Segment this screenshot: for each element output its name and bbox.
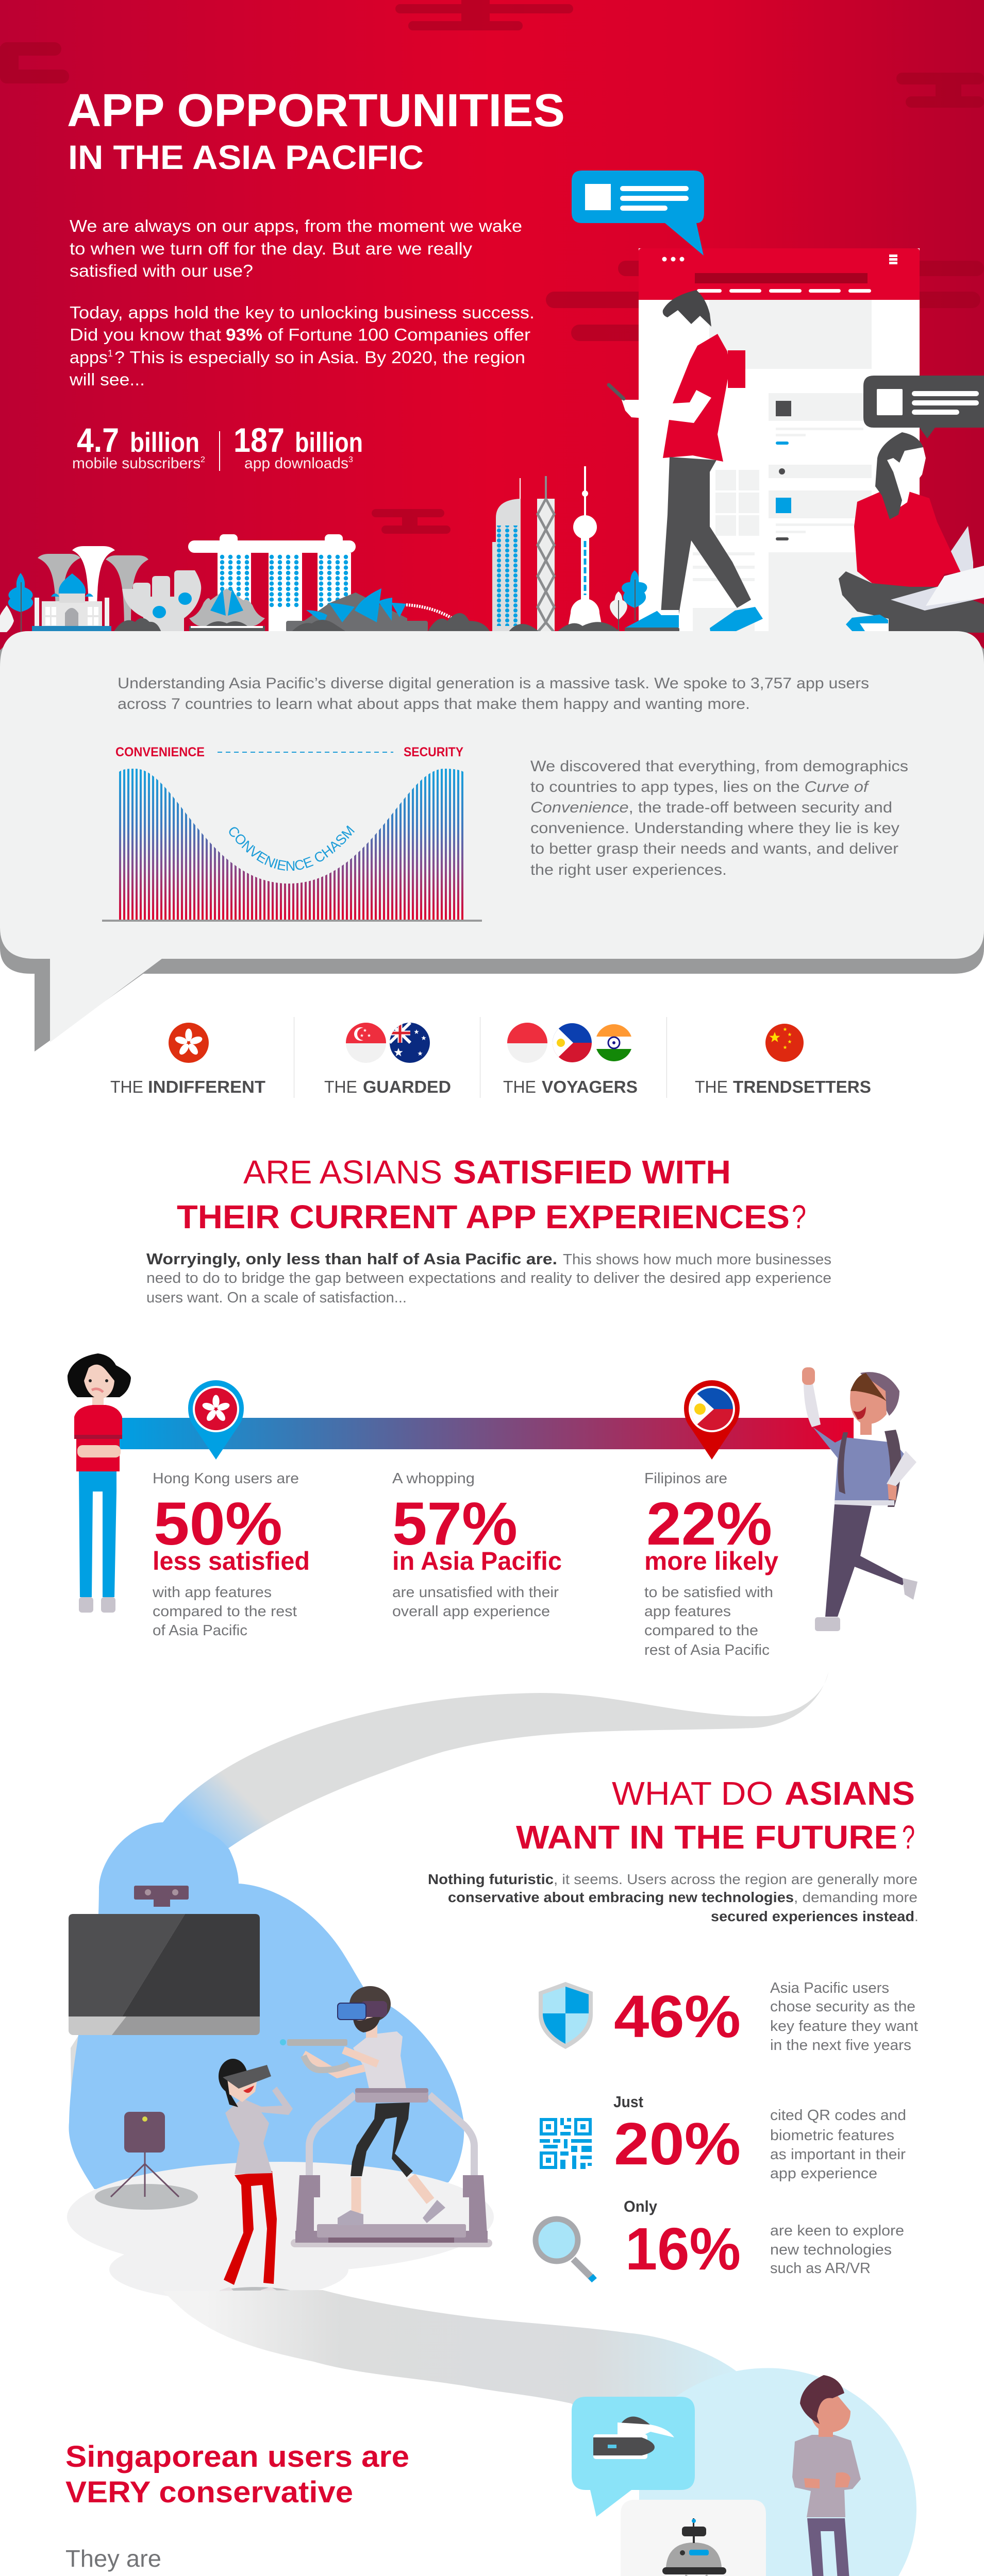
heading: future: ASIANS <box>785 1775 915 1812</box>
intro text: will see... <box>69 370 145 389</box>
text: curve of convenience: convenience. Understanding where they lie is key <box>530 820 899 837</box>
heading: future <box>516 1775 915 1856</box>
text: intro <box>118 675 869 713</box>
intro text: Today, apps hold the key to unlocking business success. <box>70 303 535 322</box>
intro text: We are always on our apps, from the moment we wake <box>70 216 522 235</box>
text: future intro <box>428 1871 919 1924</box>
panel: hero <box>0 0 984 670</box>
heading: future: WHAT DO <box>612 1775 773 1812</box>
stat: asia pacific: in Asia Pacific <box>392 1547 562 1575</box>
stat: 20 percent: Just <box>613 2093 643 2111</box>
stat: hong kong: less satisfied <box>153 1547 310 1575</box>
intro text: satisfied with our use? <box>70 261 253 280</box>
stat: hong kong: with app features <box>152 1584 272 1601</box>
stat: philippines: 22% <box>646 1490 772 1558</box>
figure: thoughtful man <box>779 2375 880 2576</box>
icon: magnifying glass <box>536 2219 594 2280</box>
stat: singapore 16 percent: They are <box>65 2545 161 2572</box>
label: the voyagers: THE <box>503 1077 536 1096</box>
icon: vr headset bubble <box>572 2397 695 2517</box>
figure: man with phone <box>609 290 763 632</box>
stat: hong kong: Hong Kong users are <box>153 1470 299 1487</box>
icon: dark chat bubble <box>863 376 984 438</box>
scene: singapore user <box>572 2368 919 2576</box>
heading: satisfaction: ? <box>792 1198 806 1235</box>
stat: 16 percent: such as AR/VR <box>770 2260 871 2277</box>
landmark: artscience museum <box>122 570 201 632</box>
stat: 20 percent: 20% <box>614 2110 741 2177</box>
stat: 16 percent <box>536 2197 904 2282</box>
text: curve of convenience: to countries to app types, lies on the Curve of <box>530 778 870 795</box>
text: satisfaction intro <box>146 1250 831 1306</box>
background clouds <box>0 0 984 534</box>
heading: singapore: Singaporean users are <box>65 2440 409 2473</box>
stat: 46 percent: 46% <box>614 1983 741 2050</box>
text: intro: across 7 countries to learn what about apps that make them happy and wanting more. <box>118 696 750 713</box>
satisfaction scale bar <box>119 1418 854 1449</box>
text: curve of convenience: We discovered that everything, from demographics <box>530 758 908 775</box>
landmark: hong kong tower <box>492 478 521 632</box>
stat: mobile subscribers: 4.7 <box>77 421 119 459</box>
flag: hong kong <box>169 1023 209 1063</box>
stat: asia pacific: 57% <box>392 1490 518 1558</box>
text: curve of convenience <box>530 758 908 878</box>
scene: vr room <box>67 1822 494 2312</box>
text: curve of convenience: to better grasp their needs and wants, and deliver <box>530 840 898 857</box>
ribbon: top <box>163 1672 828 1855</box>
intro text <box>69 216 535 389</box>
flags: indonesia, philippines, india <box>507 1023 632 1064</box>
title: IN THE ASIA PACIFIC <box>68 138 424 176</box>
landmark: gardens by the bay <box>38 546 148 625</box>
stat: 46 percent: key feature they want <box>770 2018 918 2035</box>
panel: speech bubble intro <box>0 631 984 1052</box>
label: the indifferent: INDIFFERENT <box>148 1077 265 1096</box>
intro text: 93% <box>226 325 262 344</box>
landmark: sydney opera house <box>286 588 461 632</box>
icon: shield <box>539 1982 593 2049</box>
stat: 20 percent: cited QR codes and <box>770 2107 906 2124</box>
stat: 20 percent <box>540 2093 906 2182</box>
chart: convenience curve: CONVENIENCE <box>115 745 205 759</box>
landmark: lotus temple <box>189 588 265 632</box>
stat: philippines: Filipinos are <box>644 1470 727 1487</box>
label: the trendsetters: THE <box>695 1077 728 1096</box>
icon: robot bubble <box>621 2500 766 2576</box>
figure: woman with headset <box>205 2059 306 2312</box>
title: APP OPPORTUNITIES <box>67 85 565 137</box>
icon: speaker on tripod <box>95 2112 198 2210</box>
stat: app downloads <box>234 421 363 472</box>
chart: convenience curve <box>102 745 482 922</box>
text: future intro: Nothing futuristic <box>428 1871 554 1887</box>
landmark: marina bay sands <box>188 534 356 632</box>
text: future intro: . <box>914 1908 919 1924</box>
label: the guarded <box>324 1077 451 1096</box>
stat: philippines: app features <box>644 1603 731 1620</box>
stat: philippines: more likely <box>644 1547 778 1575</box>
figure: woman with laptop <box>839 432 984 633</box>
skyline <box>0 466 647 633</box>
heading: satisfaction: SATISFIED WITH <box>453 1154 731 1191</box>
heading: future: WANT IN THE FUTURE <box>516 1819 897 1856</box>
stat: 46 percent <box>539 1980 918 2054</box>
text: satisfaction intro: need to do to bridge the gap between expectations and reality to deliver the desired app experience <box>146 1270 831 1286</box>
figure: unhappy woman <box>68 1353 131 1613</box>
stat: philippines <box>644 1470 778 1658</box>
text: future intro: conservative about embracing new technologies <box>448 1889 794 1905</box>
text: curve of convenience: the right user experiences. <box>530 861 727 878</box>
landmark: lattice tower <box>537 476 555 633</box>
phone screen <box>639 248 920 635</box>
icon: shrubs <box>113 613 620 632</box>
ribbon: middle <box>163 2290 773 2473</box>
stat: 20 percent: as important in their <box>770 2146 906 2163</box>
segment row <box>110 1017 871 1098</box>
stat: hong kong: of Asia Pacific <box>153 1622 247 1639</box>
text: future intro: , it seems. Users across the region are generally more <box>554 1871 918 1887</box>
stat: asia pacific <box>392 1470 562 1620</box>
heading: satisfaction <box>177 1154 806 1235</box>
stat: mobile subscribers: billion <box>130 427 199 458</box>
landmark: oriental pearl tower <box>567 466 603 632</box>
stat: 20 percent: app experience <box>770 2165 877 2182</box>
landmark: taj mahal <box>32 573 111 632</box>
intro text: Did you know that <box>70 325 221 344</box>
stat: 46 percent: Asia Pacific users <box>770 1980 889 1996</box>
stat: hong kong <box>152 1470 310 1639</box>
stat: mobile subscribers: 2 <box>201 455 205 464</box>
stat: asia pacific: are unsatisfied with their <box>392 1584 559 1601</box>
icon: philippines pin <box>684 1380 740 1460</box>
stat: 20 percent: biometric features <box>770 2127 894 2144</box>
figure: man on vr treadmill <box>280 1986 492 2247</box>
chart: convenience curve: CONVENIENCE CHASM <box>229 825 355 871</box>
stat: mobile subscribers: mobile subscribers <box>72 455 201 472</box>
intro text: to when we turn off for the day. But are we really <box>70 239 473 258</box>
text: satisfaction intro: This shows how much more businesses <box>563 1251 831 1268</box>
stat: asia pacific: overall app experience <box>392 1603 550 1620</box>
heading: singapore <box>65 2440 409 2509</box>
text: satisfaction intro: Worryingly, only less than half of Asia Pacific are. <box>146 1250 557 1268</box>
stat: 16 percent: Only <box>624 2197 658 2215</box>
icon: trees <box>0 570 647 632</box>
stat: philippines: rest of Asia Pacific <box>644 1642 770 1658</box>
stat: philippines: to be satisfied with <box>644 1584 773 1601</box>
flag: china <box>765 1024 804 1062</box>
stat: app downloads: 187 <box>234 421 285 459</box>
label: the guarded: THE <box>324 1077 357 1096</box>
heading: satisfaction: ARE ASIANS <box>243 1154 442 1191</box>
label: the voyagers: VOYAGERS <box>542 1077 638 1096</box>
text: satisfaction intro: users want. On a scale of satisfaction... <box>146 1290 407 1306</box>
stat: app downloads: 3 <box>348 455 353 464</box>
figure: happy boy with backpack <box>802 1367 918 1631</box>
stat: 46 percent: chose security as the <box>770 1998 915 2015</box>
icon: qr code <box>540 2118 592 2169</box>
flags: singapore and australia <box>345 1023 430 1064</box>
stat: 16 percent: 16% <box>625 2215 741 2282</box>
text: future intro: , demanding more <box>794 1889 918 1905</box>
label: the indifferent: THE <box>110 1077 143 1096</box>
stat: 16 percent: new technologies <box>770 2242 892 2258</box>
intro text: ? This is especially so in Asia. By 2020, the region <box>114 348 525 367</box>
stat: app downloads: app downloads <box>244 455 348 472</box>
stat: app downloads: billion <box>295 427 363 458</box>
icon: blue chat bubble <box>572 171 704 256</box>
stat: asia pacific: A whopping <box>392 1470 475 1487</box>
stat: philippines: compared to the <box>644 1622 758 1639</box>
icon: hong kong pin <box>188 1380 244 1460</box>
text: intro: Understanding Asia Pacific’s diverse digital generation is a massive task. We spoke to 3,757 app users <box>118 675 869 692</box>
stat: mobile subscribers <box>72 421 205 472</box>
intro text: 1 <box>108 348 113 359</box>
intro text: of Fortune 100 Companies offer <box>268 325 530 344</box>
stat: 46 percent: in the next five years <box>770 2037 911 2054</box>
heading: satisfaction: THEIR CURRENT APP EXPERIENCES <box>177 1198 790 1235</box>
title <box>67 85 565 176</box>
intro text: apps <box>70 348 108 367</box>
stat: hong kong: 50% <box>154 1490 282 1558</box>
heading: singapore: VERY conservative <box>65 2476 353 2509</box>
text: curve of convenience: Convenience , the trade-off between security and <box>530 799 892 816</box>
chart: convenience curve: SECURITY <box>404 745 463 759</box>
icon: camera <box>134 1886 189 1907</box>
icon: television <box>69 1914 260 2035</box>
heading: future: ? <box>902 1819 915 1856</box>
label: the trendsetters: TRENDSETTERS <box>733 1077 871 1096</box>
label: the guarded: GUARDED <box>363 1077 451 1096</box>
stat: 16 percent: are keen to explore <box>770 2223 904 2239</box>
stat: hong kong: compared to the rest <box>153 1603 297 1620</box>
text: future intro: secured experiences instead <box>711 1908 914 1924</box>
